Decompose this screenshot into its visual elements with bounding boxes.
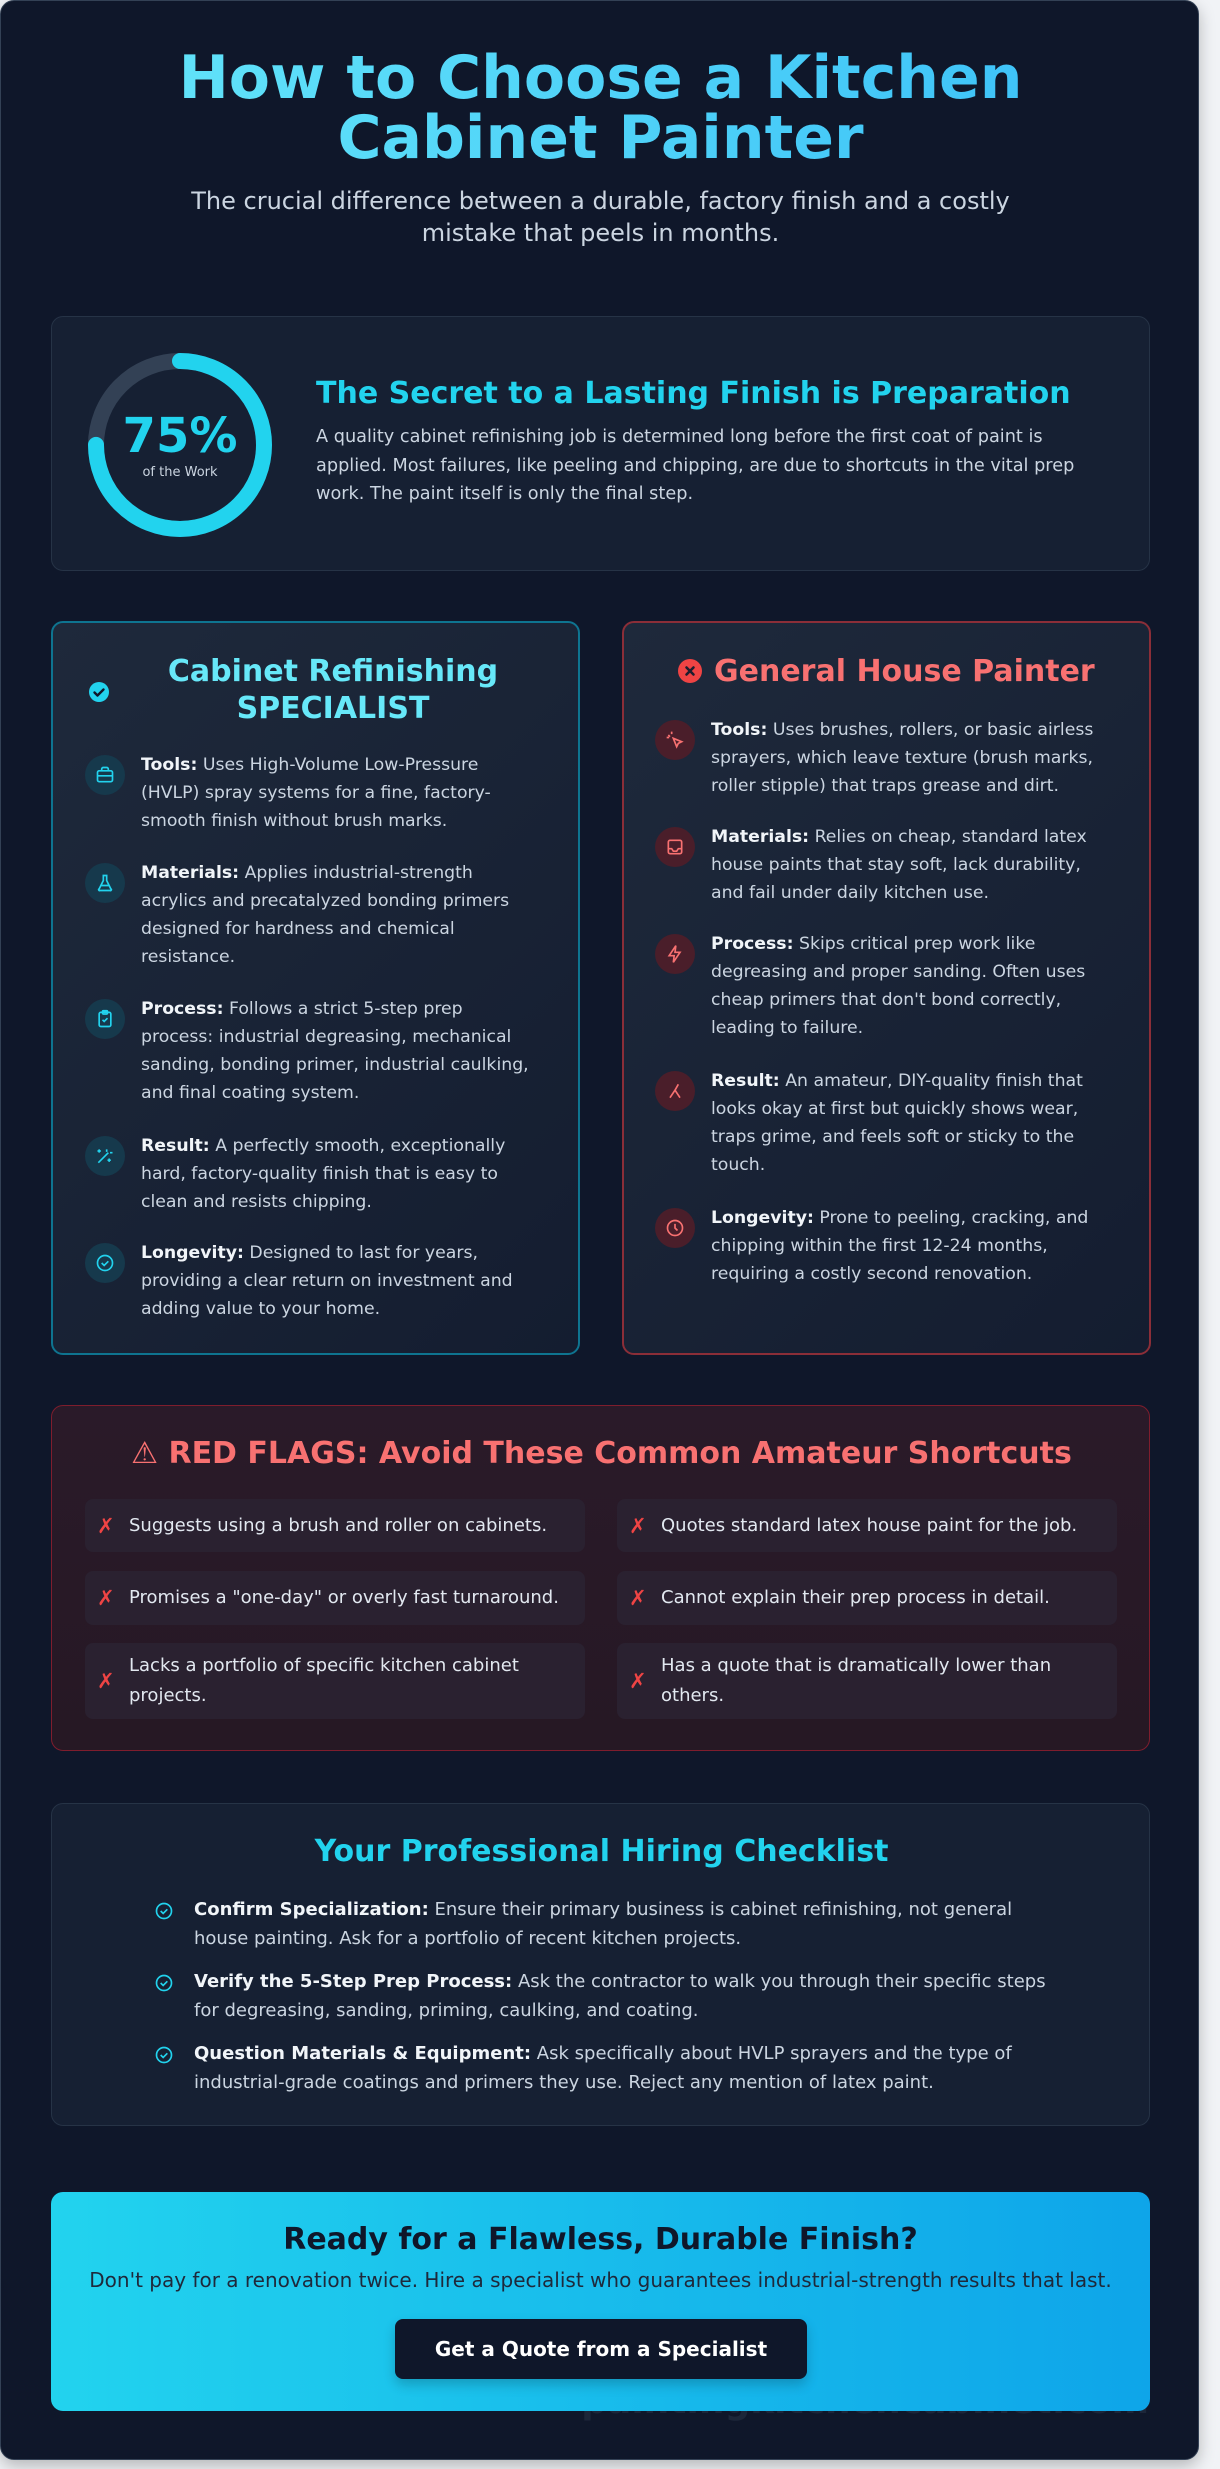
heading with x icon: General House Painter xyxy=(714,654,1095,689)
progress ring 75%: of the Work xyxy=(142,465,218,480)
item: result xyxy=(655,1071,1083,1175)
flag 5 xyxy=(85,1643,585,1719)
panel: red flags xyxy=(51,1405,1150,1751)
flag 5: Lacks a portfolio of specific kitchen cabinet xyxy=(129,1655,519,1676)
panel: general house painter: roller stipple) that traps grease and dirt. xyxy=(711,776,1059,796)
checklist item 2: Verify the 5-Step Prep Process: Ask the contractor to walk you through their specific steps xyxy=(194,1971,1046,1992)
panel: general house painter: and fail under daily kitchen use. xyxy=(711,883,989,903)
item: materials xyxy=(85,863,509,967)
panel: general house painter: sprayers, which leave texture (brush marks, xyxy=(711,748,1093,768)
progress ring 75% xyxy=(88,353,272,537)
flag 5: projects. xyxy=(129,1685,207,1706)
flag 3 xyxy=(85,1571,585,1625)
heading: SPECIALIST xyxy=(237,691,429,726)
title: How to Choose a Kitchen xyxy=(179,43,1022,113)
subtitle: mistake that peels in months. xyxy=(422,219,779,247)
panel: general house painter: chipping within the first 12-24 months, xyxy=(711,1236,1048,1256)
panel: specialist: designed for hardness and chemical xyxy=(141,919,455,939)
title: Cabinet Painter xyxy=(337,103,864,173)
panel: hiring checklist xyxy=(51,1803,1150,2126)
panel: general house painter: degreasing and proper sanding. Often uses xyxy=(711,962,1085,982)
flag 6 xyxy=(617,1643,1117,1719)
cta button xyxy=(395,2319,807,2379)
item: process xyxy=(85,999,529,1103)
panel: specialist: (HVLP) spray systems for a fine, factory- xyxy=(141,783,491,803)
flag 2 xyxy=(617,1499,1117,1552)
panel: specialist: Materials: Applies industrial-strength xyxy=(141,863,473,883)
flag 1: ✗ xyxy=(97,1514,115,1538)
icon: check badge xyxy=(89,682,109,702)
checklist item 1: Confirm Specialization: Ensure their primary business is cabinet refinishing, not general xyxy=(194,1899,1012,1920)
panel: specialist: sanding, bonding primer, industrial caulking, xyxy=(141,1055,529,1075)
item: result xyxy=(85,1136,505,1212)
flag 3: Promises a "one-day" or overly fast turnaround. xyxy=(129,1587,559,1608)
flag 4: ✗ xyxy=(629,1586,647,1610)
flag 4: Cannot explain their prep process in detail. xyxy=(661,1587,1050,1608)
flag 5: ✗ xyxy=(97,1669,115,1693)
flag 3: ✗ xyxy=(97,1586,115,1610)
panel: specialist: hard, factory-quality finish that is easy to xyxy=(141,1164,498,1184)
flag 2: Quotes standard latex house paint for the job. xyxy=(661,1514,1077,1536)
item: longevity xyxy=(85,1243,513,1319)
panel: specialist: process: industrial degreasing, mechanical xyxy=(141,1027,511,1047)
panel: general house painter: traps grime, and feels soft or sticky to the xyxy=(711,1127,1074,1147)
flag 6: Has a quote that is dramatically lower than xyxy=(661,1655,1051,1676)
checklist item 3: industrial-grade coatings and primers they use. Reject any mention of latex paint. xyxy=(194,2072,934,2093)
panel: general house painter: Process: Skips critical prep work like xyxy=(711,934,1035,954)
flag 6: others. xyxy=(661,1685,724,1706)
heading: ⚠ RED FLAGS: Avoid These Common Amateur Shortcuts xyxy=(131,1436,1072,1471)
watermark: paintingkitchencabinet.com xyxy=(581,2381,1149,2422)
heading: Cabinet Refinishing xyxy=(168,654,498,689)
panel: specialist: resistance. xyxy=(141,947,235,967)
item: tools xyxy=(85,755,491,831)
panel: specialist: Result: A perfectly smooth, exceptionally xyxy=(141,1136,505,1156)
flag 1 xyxy=(85,1499,585,1552)
item: tools xyxy=(655,720,1093,796)
panel: general house painter: house paints that stay soft, lack durability, xyxy=(711,855,1081,875)
item: process xyxy=(655,934,1085,1038)
panel: specialist: acrylics and precatalyzed bonding primers xyxy=(141,891,509,911)
panel: general house painter: Materials: Relies on cheap, standard latex xyxy=(711,827,1087,847)
panel: specialist: Longevity: Designed to last for years, xyxy=(141,1243,478,1263)
cta button: Get a Quote from a Specialist xyxy=(435,2337,767,2361)
heading: The Secret to a Lasting Finish is Preparation xyxy=(316,376,1071,411)
checklist item 2 xyxy=(156,1971,1046,2021)
title xyxy=(1,48,1200,168)
item: longevity xyxy=(655,1208,1088,1284)
panel: general house painter: looks okay at first but quickly shows wear, xyxy=(711,1099,1078,1119)
panel: specialist: Tools: Uses High-Volume Low-Pressure xyxy=(141,755,478,775)
panel: specialist: and final coating system. xyxy=(141,1083,359,1103)
progress ring 75%: 75% xyxy=(123,408,237,464)
heading: Your Professional Hiring Checklist xyxy=(315,1834,888,1869)
panel: general house painter: touch. xyxy=(711,1155,765,1175)
flag 2: ✗ xyxy=(629,1514,647,1538)
cta text: Don't pay for a renovation twice. Hire a specialist who guarantees industrial-strength results that last. xyxy=(89,2268,1112,2292)
checklist item 2: for degreasing, sanding, priming, caulking, and coating. xyxy=(194,2000,699,2021)
panel: general house painter: leading to failure. xyxy=(711,1018,863,1038)
panel: call to action xyxy=(51,2192,1150,2411)
panel: general house painter: cheap primers that don't bond correctly, xyxy=(711,990,1061,1010)
panel: specialist: providing a clear return on investment and xyxy=(141,1271,513,1291)
panel: specialist: Process: Follows a strict 5-step prep xyxy=(141,999,463,1019)
flag 6: ✗ xyxy=(629,1669,647,1693)
panel: general house painter xyxy=(622,621,1151,1355)
subtitle: The crucial difference between a durable, factory finish and a costly xyxy=(191,187,1010,215)
checklist item 3 xyxy=(156,2043,1012,2093)
panel: general house painter: Tools: Uses brushes, rollers, or basic airless xyxy=(711,720,1093,740)
heading xyxy=(168,654,498,726)
flag 4 xyxy=(617,1571,1117,1625)
checklist item 1 xyxy=(156,1899,1012,1949)
panel: general house painter: Longevity: Prone to peeling, cracking, and xyxy=(711,1208,1088,1228)
panel: general house painter: requiring a costly second renovation. xyxy=(711,1264,1032,1284)
checklist item 3: Question Materials & Equipment: Ask specifically about HVLP sprayers and the type of xyxy=(194,2043,1012,2064)
panel: specialist: clean and resists chipping. xyxy=(141,1192,372,1212)
subtitle xyxy=(191,187,1010,247)
panel: specialist: adding value to your home. xyxy=(141,1299,380,1319)
cta heading: Ready for a Flawless, Durable Finish? xyxy=(283,2222,918,2257)
panel: general house painter: Result: An amateur, DIY-quality finish that xyxy=(711,1071,1083,1091)
flag 1: Suggests using a brush and roller on cabinets. xyxy=(129,1514,547,1536)
checklist item 1: house painting. Ask for a portfolio of recent kitchen projects. xyxy=(194,1928,741,1949)
panel: specialist xyxy=(51,621,580,1355)
panel: preparation xyxy=(51,316,1150,571)
item: materials xyxy=(655,827,1087,903)
paragraph: A quality cabinet refinishing job is determined long before the first coat of paint is applied. Most failures, like peeling and chipping, are due to shortcuts in the vital prep work. The paint itself is only the final step. xyxy=(316,427,1074,504)
panel: specialist: smooth finish without brush marks. xyxy=(141,811,447,831)
